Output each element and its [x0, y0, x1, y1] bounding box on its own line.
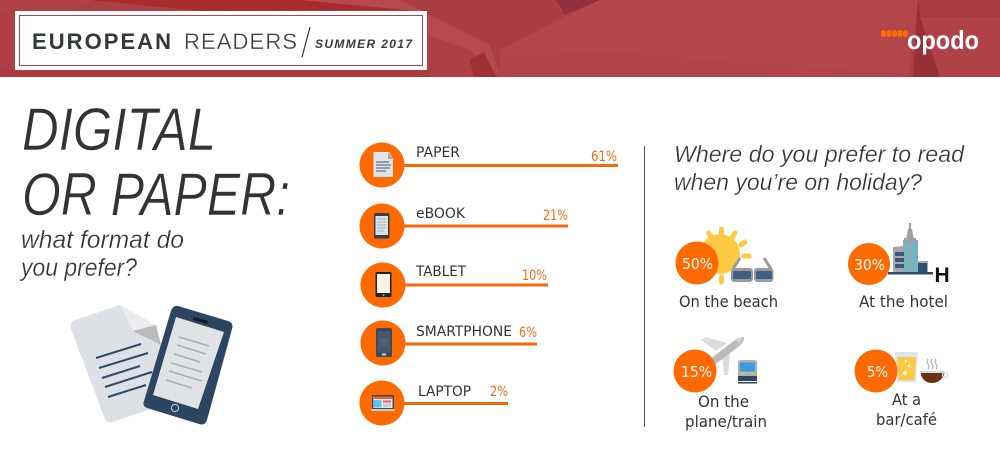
- bar: smartphone 6%: SMARTPHONE: [416, 324, 512, 340]
- bar: tablet 10%: TABLET: [415, 264, 466, 280]
- bar: smartphone 6%: [360, 320, 537, 366]
- icon: smartphone: [376, 328, 392, 357]
- title box: READERS: [184, 29, 297, 54]
- icon: plane: [701, 337, 744, 375]
- bar: laptop 2%: LAPTOP: [418, 384, 471, 400]
- item: on the plane or train 15%: plane/train: [685, 412, 767, 431]
- logo: opodo: opodo: [907, 25, 979, 55]
- icon: train: [738, 360, 757, 384]
- bar: smartphone 6%: 6%: [519, 325, 537, 341]
- item: at a bar or cafe 5%: [854, 350, 948, 429]
- item: at a bar or cafe 5%: bar/café: [876, 410, 937, 429]
- icon: coffee cup: [920, 359, 948, 383]
- header banner: [0, 0, 1000, 77]
- title box: SUMMER 2017: [315, 37, 413, 51]
- icon: tablet: [376, 272, 392, 297]
- item: at the hotel 30%: At the hotel: [859, 292, 948, 311]
- bar: eBook 21%: 21%: [543, 208, 568, 224]
- icon: skyline: [888, 223, 933, 274]
- subheading: you prefer?: [19, 254, 137, 282]
- item: on the plane or train 15%: On the: [698, 392, 749, 411]
- icon: e-reader: [374, 213, 390, 238]
- item: on the plane or train 15%: [674, 337, 767, 431]
- bar: eBook 21%: eBOOK: [416, 206, 466, 222]
- item: on the beach 50%: On the beach: [679, 292, 778, 311]
- bar: laptop 2%: [360, 380, 508, 426]
- item: at the hotel 30%: 30%: [854, 256, 885, 274]
- title: European Readers: EUROPEAN: [32, 29, 171, 54]
- bar: tablet 10%: 10%: [522, 268, 547, 284]
- bar: paper 61%: 61%: [591, 149, 617, 165]
- icon: letter H: H: [934, 264, 950, 287]
- heading: Digital or paper: DIGITAL: [22, 96, 216, 163]
- bar: laptop 2%: 2%: [490, 384, 508, 400]
- item: at a bar or cafe 5%: At a: [892, 390, 921, 409]
- item: on the beach 50%: [676, 229, 778, 311]
- icon: document: [374, 152, 393, 177]
- heading: where do you prefer to read: [674, 141, 965, 195]
- bar: tablet 10%: [360, 262, 548, 308]
- item: at the hotel 30%: [848, 223, 950, 311]
- subheading: what format do: [21, 226, 184, 254]
- bar: eBook 21%: [360, 204, 568, 248]
- icon: glass: [895, 352, 918, 382]
- heading: where do you prefer to read: Where do you prefer to read: [674, 141, 965, 167]
- heading: where do you prefer to read: when you’re on holiday?: [674, 169, 922, 195]
- bar: paper 61%: PAPER: [416, 145, 460, 161]
- heading: Digital or paper: OR PAPER:: [22, 161, 290, 228]
- title box: [15, 11, 427, 70]
- logo: opodo: [881, 25, 979, 55]
- subheading: [19, 226, 184, 282]
- bar: paper 61%: [360, 142, 618, 188]
- heading: Digital or paper: [22, 96, 290, 228]
- icon: sunglasses: [731, 258, 774, 282]
- icon: sun: [700, 229, 749, 282]
- icon: laptop: [371, 395, 395, 411]
- item: at a bar or cafe 5%: 5%: [867, 363, 888, 381]
- item: on the beach 50%: 50%: [682, 255, 713, 273]
- item: on the plane or train 15%: 15%: [681, 363, 712, 381]
- icon: paper and e-reader: [70, 305, 232, 424]
